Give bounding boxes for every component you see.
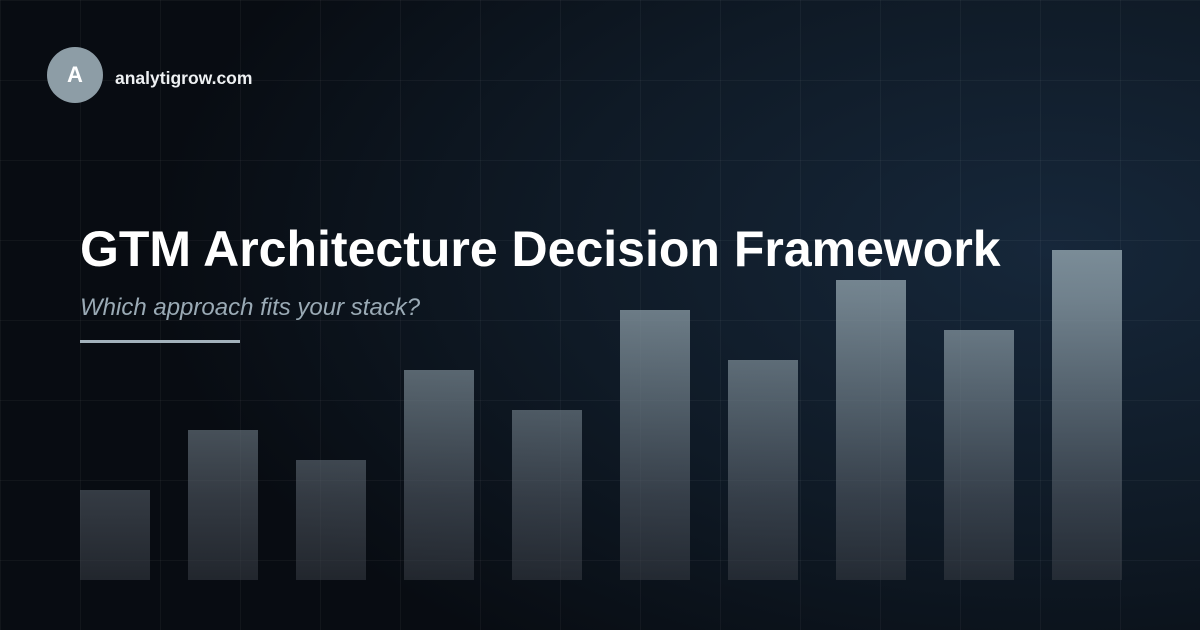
accent underline — [80, 340, 240, 343]
icon: logo circle — [47, 47, 103, 103]
subtitle: Which approach fits your stack? — [80, 294, 420, 321]
bar chart — [80, 250, 1122, 580]
icon: logo circle: A — [67, 62, 83, 87]
brand name: analytigrow.com — [115, 68, 252, 88]
title: GTM Architecture Decision Framework — [80, 221, 1001, 277]
logo — [47, 47, 252, 103]
